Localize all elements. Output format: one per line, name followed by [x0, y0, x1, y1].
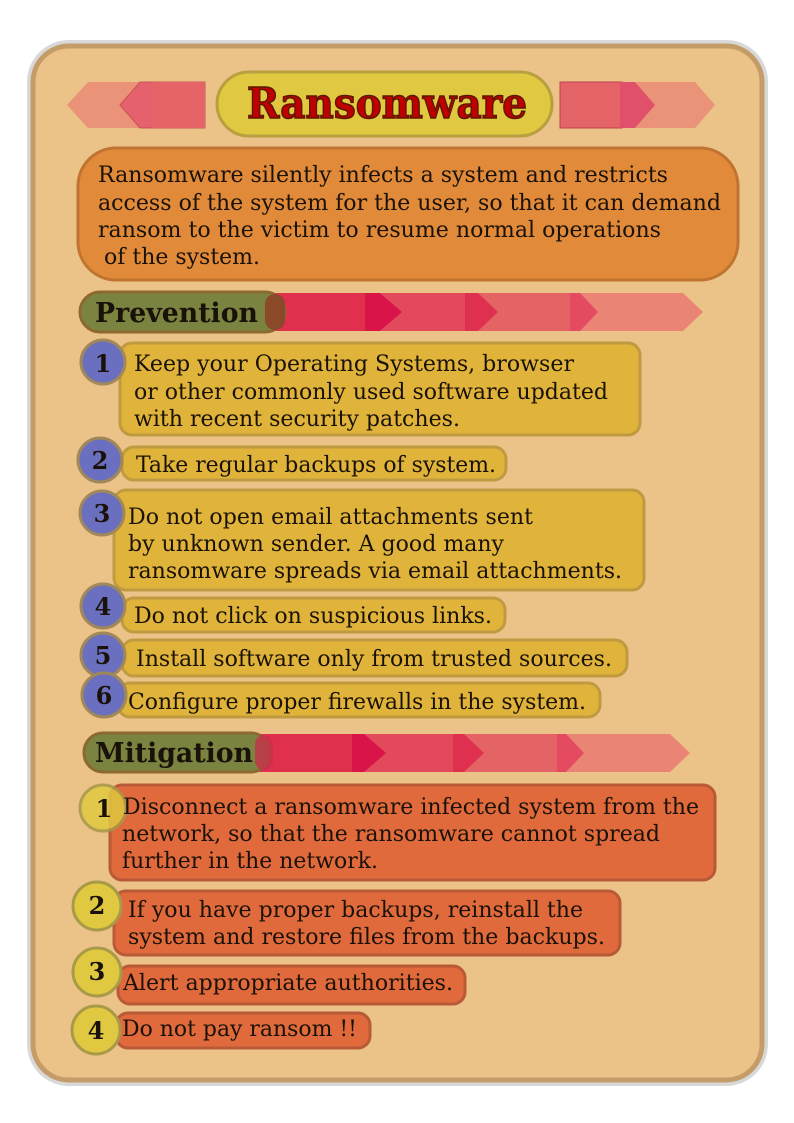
prevention item 2: Take regular backups of system.: [136, 453, 496, 478]
prevention item 3: 3: [94, 499, 110, 528]
heading: Prevention: Prevention: [95, 298, 258, 329]
description box: access of the system for the user, so that it can demand: [98, 191, 721, 216]
description box: of the system.: [104, 245, 260, 270]
mitigation item 2: system and restore files from the backups.: [128, 925, 605, 950]
mitigation item 1: [80, 785, 715, 880]
prevention item 3: ransomware spreads via email attachments.: [128, 559, 622, 584]
mitigation item 2: 2: [89, 891, 105, 920]
prevention item 6: [82, 673, 600, 717]
heading: Mitigation: [84, 733, 690, 772]
prevention item 4: [81, 584, 505, 632]
description box: ransom to the victim to resume normal operations: [98, 218, 661, 243]
description box: [78, 148, 738, 280]
heading: Prevention: [80, 292, 703, 332]
mitigation item 4: 4: [88, 1016, 104, 1045]
prevention item 4: 4: [95, 592, 111, 621]
prevention item 2: [78, 438, 506, 482]
title: Ransomware: [247, 79, 527, 128]
mitigation item 1: further in the network.: [122, 849, 378, 874]
prevention item 3: [80, 490, 644, 590]
prevention item 6: 6: [96, 681, 112, 710]
prevention item 1: with recent security patches.: [134, 407, 460, 432]
mitigation item 1: 1: [96, 794, 112, 823]
description box: Ransomware silently infects a system and restricts: [98, 163, 668, 188]
mitigation item 4: [72, 1006, 370, 1054]
icon: right arrows: [560, 82, 715, 128]
prevention item 6: Configure proper firewalls in the system.: [128, 690, 586, 715]
prevention item 1: or other commonly used software updated: [134, 380, 608, 405]
prevention item 3: by unknown sender. A good many: [128, 532, 505, 557]
mitigation item 2: [73, 882, 620, 955]
prevention item 1: [81, 340, 640, 435]
mitigation item 3: Alert appropriate authorities.: [122, 971, 453, 996]
prevention item 3: Do not open email attachments sent: [128, 505, 533, 530]
mitigation item 1: network, so that the ransomware cannot spread: [122, 822, 660, 847]
mitigation item 1: Disconnect a ransomware infected system from the: [123, 795, 699, 820]
prevention item 1: Keep your Operating Systems, browser: [134, 352, 574, 377]
mitigation item 2: If you have proper backups, reinstall the: [128, 898, 583, 923]
mitigation item 3: [73, 948, 465, 1004]
prevention item 1: 1: [95, 349, 111, 378]
mitigation item 4: Do not pay ransom !!: [122, 1017, 357, 1042]
prevention item 4: Do not click on suspicious links.: [134, 604, 492, 629]
title: [217, 72, 552, 136]
prevention item 5: Install software only from trusted sources.: [136, 647, 612, 672]
icon: left arrows: [67, 82, 205, 128]
prevention item 5: [81, 633, 627, 677]
prevention item 2: 2: [92, 446, 108, 475]
heading: Mitigation: Mitigation: [95, 738, 253, 769]
title banner: [67, 72, 715, 136]
prevention item 5: 5: [95, 641, 111, 670]
mitigation item 3: 3: [89, 957, 105, 986]
